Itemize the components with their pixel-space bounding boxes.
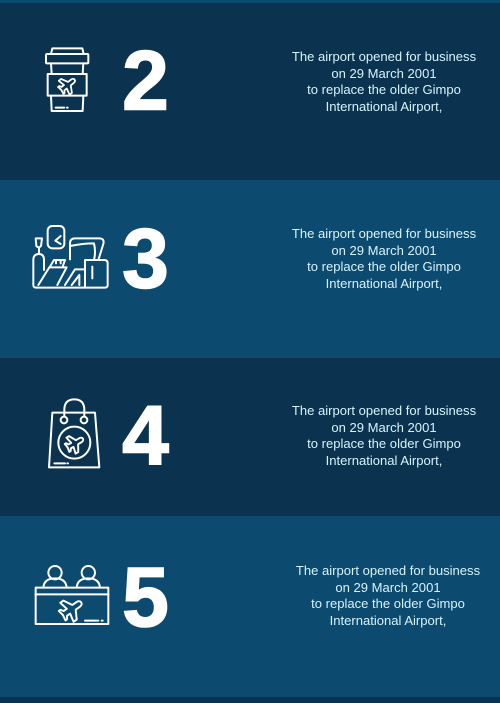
panel: item 4 background xyxy=(0,358,500,516)
text block: item 2: on 29 March 2001 xyxy=(331,66,437,81)
icon: coffee cup with plane xyxy=(46,48,88,111)
text block: item 2: International Airport, xyxy=(326,99,442,114)
text block: item 4: International Airport, xyxy=(326,453,442,468)
number 2: 2 xyxy=(122,34,169,128)
text block: item 5: The airport opened for business xyxy=(296,563,480,578)
number 5: 5 xyxy=(122,550,169,644)
panel: item 3 background xyxy=(0,180,500,358)
text block: item 3 xyxy=(292,226,476,291)
text block: item 5 xyxy=(296,563,480,628)
icon: check-in desk xyxy=(36,566,108,625)
panel: item 2 background xyxy=(0,3,500,180)
text block: item 4: to replace the older Gimpo xyxy=(307,436,461,451)
text block: item 2: to replace the older Gimpo xyxy=(307,82,461,97)
text block: item 2: The airport opened for business xyxy=(292,49,476,64)
icon: shopping bag xyxy=(49,399,99,467)
icon: airplane seat xyxy=(33,226,108,288)
panel: bottom strip xyxy=(0,697,500,703)
number 3: 3 xyxy=(122,212,169,306)
text block: item 5: to replace the older Gimpo xyxy=(311,596,465,611)
text block: item 3: to replace the older Gimpo xyxy=(307,259,461,274)
number 4: 4 xyxy=(122,388,169,482)
text block: item 4 xyxy=(292,403,476,468)
text block: item 4: on 29 March 2001 xyxy=(331,420,437,435)
text block: item 4: The airport opened for business xyxy=(292,403,476,418)
text block: item 3: The airport opened for business xyxy=(292,226,476,241)
text block: item 3: on 29 March 2001 xyxy=(331,243,437,258)
text block: item 5: International Airport, xyxy=(330,613,446,628)
text block: item 2 xyxy=(292,49,476,114)
panel: item 5 background xyxy=(0,516,500,697)
text block: item 5: on 29 March 2001 xyxy=(335,580,441,595)
text block: item 3: International Airport, xyxy=(326,276,442,291)
